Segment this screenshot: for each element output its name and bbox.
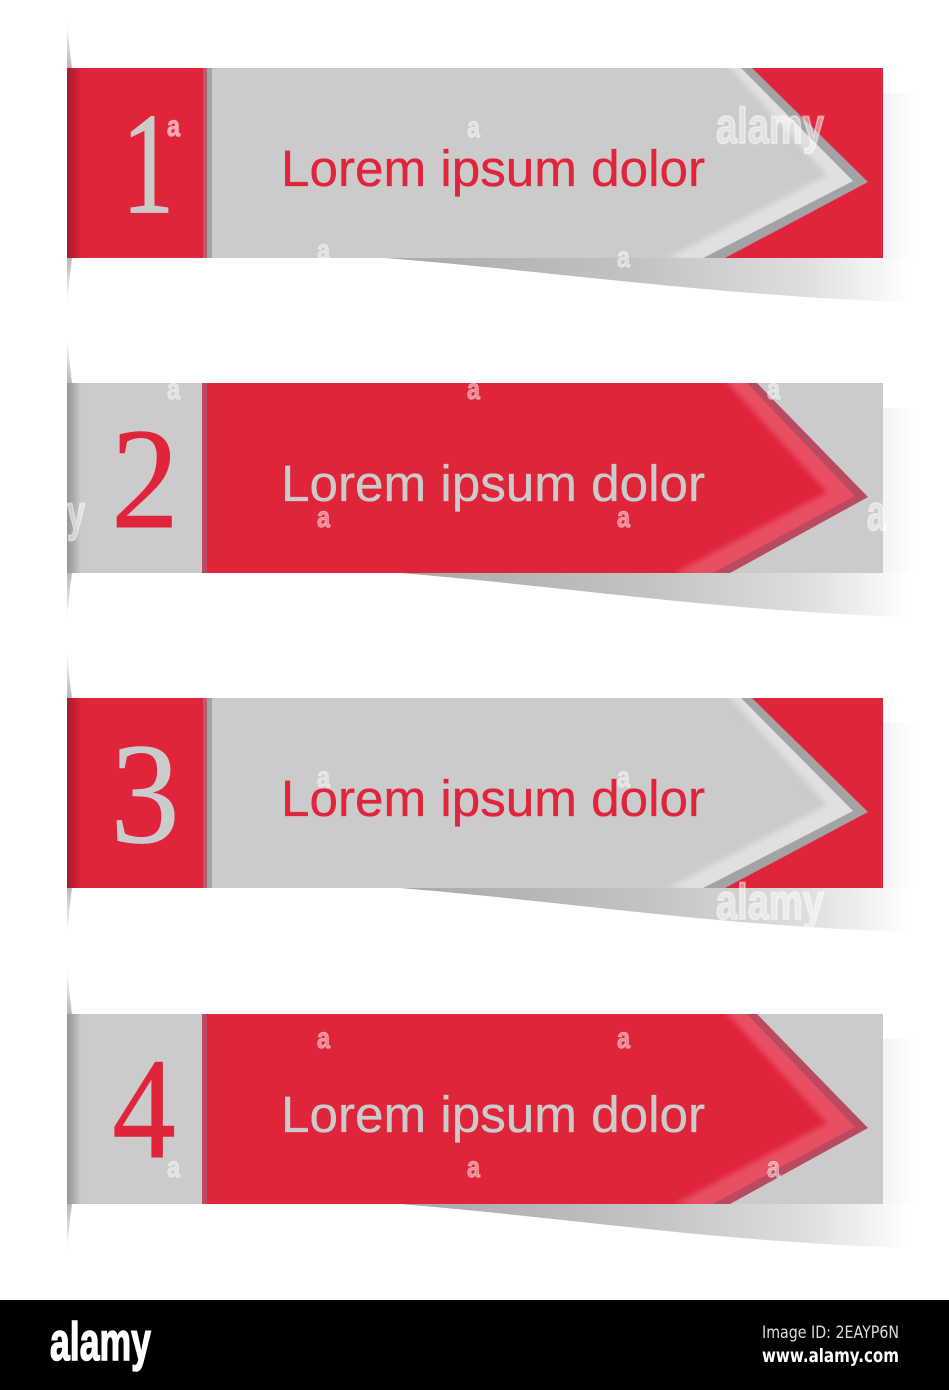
banner 2	[67, 335, 915, 621]
watermarks: y	[67, 485, 85, 541]
watermarks: a	[617, 501, 630, 534]
footer logo: alamy	[50, 1312, 151, 1372]
banner 3 number: 3	[110, 713, 180, 874]
footer image id: Image ID: 2EAYP6N	[762, 1323, 899, 1343]
watermarks: a	[167, 1151, 180, 1184]
watermarks: a	[617, 1022, 630, 1055]
banner 2 label: Lorem ipsum dolor	[281, 455, 705, 512]
watermarks: a	[767, 1151, 780, 1184]
banner 3 label: Lorem ipsum dolor	[281, 770, 705, 827]
watermarks: alamy	[716, 98, 824, 154]
banner 3 background strip	[67, 698, 883, 888]
banner 1 shadows	[67, 20, 915, 306]
banner 4 number: 4	[112, 1030, 176, 1189]
watermarks: a	[467, 111, 480, 144]
footer bar	[0, 1300, 949, 1390]
watermarks: a	[317, 761, 330, 794]
watermarks: a	[317, 501, 330, 534]
banner 2 arrow	[202, 377, 868, 579]
watermarks: a	[317, 234, 330, 267]
banner 1 background strip	[67, 68, 883, 258]
banner 1 label: Lorem ipsum dolor	[281, 140, 705, 197]
banner 4 arrow	[202, 1008, 868, 1210]
footer url: www.alamy.com	[762, 1345, 899, 1367]
banner 1	[67, 20, 915, 306]
banner 1 number: 1	[122, 85, 174, 244]
watermarks: a	[617, 761, 630, 794]
banner 4 label: Lorem ipsum dolor	[281, 1086, 705, 1143]
banner 2 shadows	[67, 335, 915, 621]
watermarks: a	[767, 373, 780, 406]
watermarks: a	[867, 485, 887, 541]
banner 3 arrow	[203, 692, 868, 894]
banner 2 background strip	[67, 383, 883, 573]
watermarks: a	[617, 241, 630, 274]
watermarks	[67, 98, 887, 1184]
banner 4 background strip	[67, 1014, 883, 1204]
banner 4	[67, 966, 915, 1252]
banner 4 shadows	[67, 966, 915, 1252]
watermarks: a	[467, 1151, 480, 1184]
watermarks: a	[467, 373, 480, 406]
watermarks: a	[167, 110, 180, 143]
watermarks: alamy	[716, 874, 824, 930]
banner 3 shadows	[67, 650, 915, 936]
watermarks: a	[167, 373, 180, 406]
watermarks: a	[317, 1022, 330, 1055]
banner 3	[67, 650, 915, 936]
banner 2 number: 2	[111, 399, 179, 559]
banner 1 arrow	[203, 62, 868, 264]
